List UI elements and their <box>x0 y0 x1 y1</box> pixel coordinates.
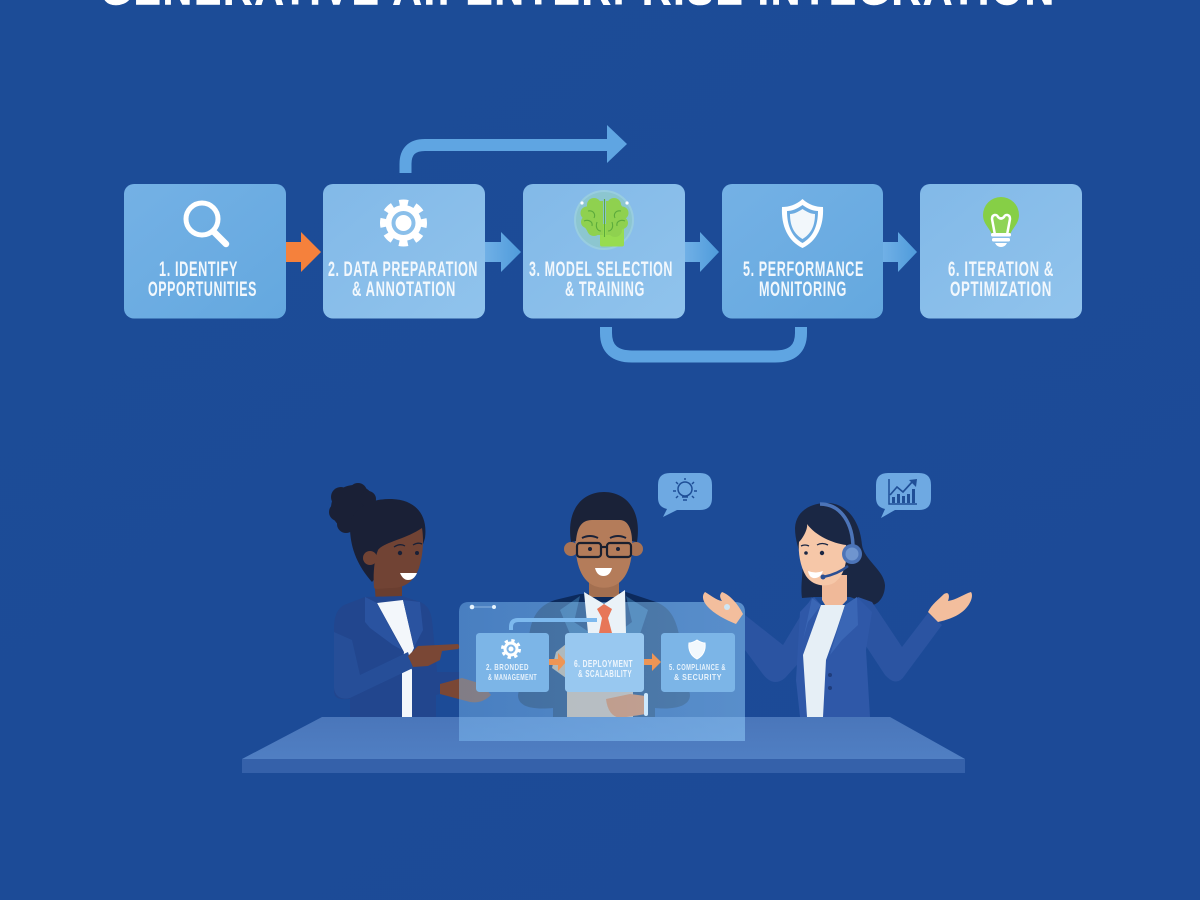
panel: step 2 data preparation <box>323 184 485 318</box>
man's shirt collar and tie <box>584 590 626 633</box>
arrow: step 1 to step 2 <box>286 232 321 272</box>
connector in screen <box>511 620 597 630</box>
step 5 label: MONITORING <box>759 278 847 301</box>
jacket <box>796 597 872 717</box>
mini panel: right <box>661 633 735 692</box>
panel: holographic screen <box>459 602 745 741</box>
step 6 label <box>948 258 1054 301</box>
icon: bar chart with trend arrow <box>889 479 917 504</box>
icon: magnifying glass <box>186 203 226 244</box>
icon: mini gear <box>502 640 520 658</box>
hair <box>570 492 638 542</box>
arm <box>334 632 413 699</box>
eyebrows and eyes <box>394 543 422 555</box>
person: man with glasses <box>518 492 690 718</box>
step 3 label <box>529 258 673 301</box>
lapels <box>365 597 402 650</box>
step 6 label: OPTIMIZATION <box>950 278 1052 301</box>
step 6 label: 6. ITERATION & <box>948 258 1054 281</box>
mini panel: right: & SECURITY <box>674 672 722 682</box>
arms <box>745 597 942 682</box>
woman's lower hand behind screen <box>440 678 491 702</box>
step 2 label: 2. DATA PREPARATION <box>328 258 478 281</box>
eyebrows <box>801 544 828 546</box>
icon: brain <box>574 190 634 250</box>
mini panel: left: & MANAGEMENT <box>488 672 537 682</box>
icon: light bulb <box>983 197 1019 247</box>
step 3 label: 3. MODEL SELECTION <box>529 258 673 281</box>
icon: gear <box>380 199 427 247</box>
step 5 label: 5. PERFORMANCE <box>743 258 864 281</box>
arrow: step 3 to step 5 <box>685 232 719 272</box>
smile <box>808 571 823 578</box>
arrow: step 2 to step 3 <box>485 232 521 272</box>
step 3 label: & TRAINING <box>565 278 645 301</box>
jacket <box>334 596 460 717</box>
neck <box>374 575 402 616</box>
head <box>575 520 632 588</box>
person: woman with hair bun, pointing <box>329 483 460 717</box>
icon: idea bulb <box>673 478 697 500</box>
arrow: top skip connector <box>406 125 627 173</box>
pointing hand <box>408 644 460 667</box>
speech bubble: growth chart <box>876 473 931 518</box>
far hand <box>552 644 566 678</box>
hair <box>795 503 885 605</box>
step 2 label <box>328 258 478 301</box>
orange arrow a to b <box>549 653 566 671</box>
shirt <box>803 605 845 717</box>
hair and bun <box>329 483 425 582</box>
neck <box>822 575 847 616</box>
hands <box>606 694 646 718</box>
eyebrows <box>582 536 626 538</box>
lapels <box>560 596 592 634</box>
step 2 label: & ANNOTATION <box>352 278 456 301</box>
step 5 label <box>743 258 864 301</box>
step 1 label: OPPORTUNITIES <box>148 278 257 301</box>
right hand <box>928 592 972 622</box>
mini panel: centre: 6. DEPLOYMENT <box>574 659 633 670</box>
headset <box>820 504 862 580</box>
person: woman with headset <box>745 503 972 717</box>
head <box>374 528 423 589</box>
orange arrow b to c <box>644 653 661 671</box>
step 1 label <box>148 258 257 301</box>
lapels <box>803 598 821 640</box>
mini panel: left <box>476 633 549 692</box>
face <box>799 524 846 585</box>
panel: step 1 identify opportunities <box>124 184 286 318</box>
step 1 label: 1. IDENTIFY <box>159 258 238 281</box>
ears <box>564 542 578 556</box>
lower shirt <box>567 690 633 717</box>
neck <box>589 575 619 597</box>
shirt <box>377 600 414 717</box>
screen contents <box>470 605 735 692</box>
mini panel: centre: & SCALABILITY <box>578 669 632 680</box>
window dots <box>470 605 496 609</box>
arrow: bottom feedback connector <box>606 327 801 356</box>
buttons <box>828 673 832 677</box>
smile <box>595 568 612 576</box>
mini panel: left: 2. BRONDED <box>486 662 529 672</box>
suit <box>518 592 690 717</box>
panel: step 3 model selection <box>523 184 685 318</box>
panel: step 6 iteration and optimization <box>920 184 1082 318</box>
panel: step 5 performance monitoring <box>722 184 883 318</box>
mini panel: right: 5. COMPLIANCE & <box>669 662 726 672</box>
icon: mini shield <box>689 640 705 659</box>
mini panel: centre <box>565 633 644 692</box>
arrow: step 5 to step 6 <box>883 232 917 272</box>
speech bubble: light bulb idea <box>658 473 712 517</box>
glasses <box>577 543 631 557</box>
icon: raised left hand of headset woman <box>703 592 743 624</box>
table <box>242 717 965 773</box>
icon: shield <box>782 199 823 248</box>
